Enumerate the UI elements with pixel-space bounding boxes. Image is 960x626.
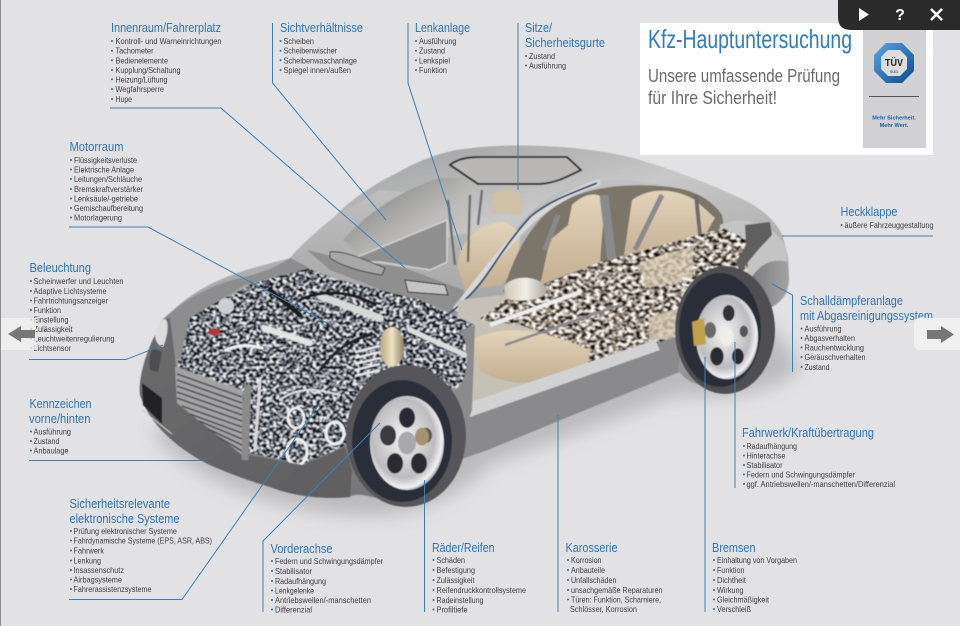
item list: Unfallschäden [571,575,617,585]
item list: Antriebswellen/-manschetten [275,595,371,605]
icon: help: ? [895,7,905,24]
leader line [29,345,163,360]
callout: Räder/Reifen [424,480,526,614]
icon: close [931,9,942,20]
front wheel arch [346,365,466,507]
hood edge [160,258,310,360]
item list: Anbaulage [34,446,69,456]
logo panel: Mehr Wert. [880,123,909,129]
item list: Leuchtweitenregulierung [34,334,115,344]
leader line [734,342,736,488]
item list: Schlösser, Korrosion [570,604,637,614]
item list: Scheibenwaschanlage [284,55,357,65]
item list [415,36,457,75]
item list: Ausführung [529,60,566,70]
heading: Vorderachse [270,542,333,556]
ground shadow [150,320,800,516]
item list: Schäden [436,555,465,565]
item list [525,51,566,70]
rear tire [679,273,761,387]
callout: Schalldämpferanlage: mit Abgasreinigungssystem [800,309,933,323]
item list [800,324,866,372]
icon: TÜV octagon [874,43,914,83]
callout: Vorderachse [263,423,383,614]
item list: Zustand [529,51,555,61]
arrow: next [914,318,960,350]
item list: Lenkgelenke [275,586,314,596]
item list: Wegfahrsperre [116,84,164,94]
callout: Kennzeichen vorne/hinten [29,397,203,460]
item list: Profiltiefe [436,604,468,614]
rear seats [623,191,715,262]
item list: Elektrische Anlage [74,164,134,174]
item list: Scheiben [284,36,314,46]
item list: Insassenschutz [74,565,124,575]
item list: Funktion [717,565,745,575]
callout: Lenkanlage [408,21,470,250]
item list: Zustand [419,46,445,56]
item list: äußere Fahrzeuggestaltung [844,220,934,230]
rear quarter panel [720,221,787,290]
callout: Sitze/Sicherheitsgurte [518,21,605,190]
item list: Hinterachse [746,450,786,460]
item list: Stabilisator [746,460,783,470]
item list: Ausführung [419,36,457,46]
side window interior [503,185,724,292]
chassis machinery [478,228,748,392]
item list: Radaufhängung [746,441,797,451]
rear wheel arch [675,266,775,394]
icon: TÜV octagon: TÜV [885,56,903,69]
item list: Einstellung [34,314,69,324]
callout: Bremsen [705,357,797,614]
item list: Zustand [804,362,830,372]
front coil spring [355,346,380,376]
item list: Befestigung [436,565,475,575]
item list: ggf. Antriebswellen/-manschetten/Differenzial [746,479,895,489]
leader line [557,415,559,612]
item list [280,36,357,75]
callout: Sicherheitsrelevante elektronische Systeme: elektronische Systeme [70,512,180,526]
front bumper [140,318,352,498]
callout: Kennzeichen vorne/hinten: vorne/hinten [29,412,91,426]
item list: Fahrtrichtungsanzeiger [34,296,108,306]
illustration: cutaway car [140,146,800,516]
blue cable [423,183,597,318]
rocker sill [453,335,682,462]
item list: Verschleiß [717,604,751,614]
heading: Heckklappe [840,205,898,219]
item list: Bremskraftverstärker [74,184,143,194]
heading: Sicherheitsrelevante [70,497,170,511]
brake booster [380,327,404,367]
item list: Lenkung [74,556,101,566]
item list [70,526,212,594]
item list: Prüfung elektronischer Systeme [74,526,177,536]
item list: Funktion [419,65,447,75]
item list: Fahrwerk [74,546,105,556]
item list: Gemischaufbereitung [74,203,143,213]
item list [432,555,526,614]
engine pulleys [287,408,344,465]
item list [567,555,663,614]
lower door cut area [455,228,745,410]
item list: Zulässigkeit [436,575,475,585]
front tire [352,380,452,502]
leader line [110,108,405,268]
center seat [540,195,605,285]
item list: Wirkung [717,585,744,595]
rear door beige panel [640,246,694,288]
item list: Heizung/Lüftung [116,74,168,84]
logo slogan: Mehr Sicherheit. [872,116,916,122]
heading: Beleuchtung [30,261,91,275]
item list: Stabilisator [275,566,312,576]
seat-back struts [448,190,482,265]
heading: Schalldämpferanlage [800,294,903,308]
item list: Kupplung/Schaltung [116,65,181,75]
main title: Kfz-Hauptuntersuchung [648,24,852,54]
item list [743,441,895,489]
leader line [424,480,426,612]
item list: Fahrdynamische Systeme (EPS, ASR, ABS) [74,536,212,546]
title box: für Ihre Sicherheit! [648,87,777,108]
item list: Türen: Funktion, Scharniere, [571,594,661,604]
item list: Ausführung [804,324,842,334]
item list: Kontroll- und Warneinrichtungen [116,36,222,46]
front fender [453,325,475,462]
heading: Bremsen [712,541,756,555]
seat belts and pillars [545,195,700,262]
callout: Karosserie [558,415,663,614]
item list: Scheinwerfer und Leuchten [34,276,124,286]
callout: Fahrwerk/Kraftübertragung [735,342,895,489]
callout: Sicherheitsrelevante elektronische Systeme [69,403,320,600]
leader line [782,235,933,237]
item list: Dichtheit [717,575,747,585]
item list: Radeinstellung [436,595,484,605]
longitudinal tube [490,292,580,325]
leader line [517,23,519,190]
windshield glass [343,178,470,262]
item list: unsachgemäße Reparaturen [571,585,663,595]
item list: Hupe [116,94,132,104]
rear bumper [745,261,789,352]
heading: Räder/Reifen [432,541,495,555]
front headrest [492,190,523,215]
item list: Geräuschverhalten [804,352,866,362]
item list: Lichtsensor [34,343,71,353]
roof line chrome [455,182,600,310]
leader line [29,460,203,462]
roof panel [333,146,786,262]
callout: Schalldämpferanlage [772,284,933,372]
item list: Korrosion [571,555,602,565]
dashboard and cowl [307,250,470,318]
item list: Abgasverhalten [804,333,855,343]
item list: Lenksäule/-getriebe [74,194,138,204]
callout: Sitze/Sicherheitsgurte: Sicherheitsgurte [525,36,605,50]
heading: Fahrwerk/Kraftübertragung [742,426,874,440]
item list: Gleichmäßigkeit [717,594,770,604]
item list [713,555,797,614]
arrow: previous [1,318,36,350]
rear lamp unit [736,222,772,272]
item list: Scheibenwischer [284,46,337,56]
item list: Fahrerassistenzsysteme [74,584,152,594]
toolbar [838,0,960,30]
heading: Motorraum [70,140,124,154]
item list: Rauchentwicklung [804,342,864,352]
item list: Federn und Schwingungsdämpfer [746,470,855,480]
front wheel rim [370,396,444,490]
leader line [772,284,792,372]
item list: Radaufhängung [275,576,326,586]
heading: Innenraum/Fahrerplatz [111,21,221,35]
sunroof [450,157,581,184]
leader line [263,423,380,612]
callout: Motorraum [69,140,327,323]
item list: Bedienelemente [116,55,168,65]
rear wheel rim [696,295,758,379]
item list: Lenkspiel [419,55,450,65]
rear brake caliper [692,318,706,346]
item list: Anbauteile [571,565,605,575]
heading: Kennzeichen [30,397,92,411]
item list [30,276,124,353]
icon: play [859,8,869,21]
item list [111,36,222,104]
item list: Motorlagerung [74,212,122,222]
radiator [175,367,251,460]
door mirror [504,278,547,300]
subtitle: Unsere umfassende Prüfung [648,65,840,86]
item list: Reifendruckkontrollsysteme [436,585,526,595]
leader line [272,23,386,220]
headlight [155,319,168,347]
callout: Innenraum/Fahrerplatz [110,21,405,268]
callout: Sichtverhältnisse [272,21,386,220]
leader line [69,227,327,323]
item list: Flüssigkeitsverluste [74,155,137,165]
front door panel behind windshield [345,220,447,270]
air intake [142,383,162,424]
rear coil spring [682,278,702,307]
front seat cushion [472,330,590,383]
front seat through windshield [458,222,520,290]
item list: Funktion [34,305,61,315]
heading: Sitze/ [525,21,552,35]
heading: Sichtverhältnisse [280,21,363,35]
engine tubes [226,290,465,450]
red cap [208,328,220,336]
callout: Beleuchtung [29,261,163,360]
item list: Spiegel innen/außen [284,65,351,75]
leader line [704,357,706,612]
callout: Heckklappe [782,205,934,236]
engine bay [178,262,475,464]
item list: Zulässigkeit [34,324,73,334]
title box [640,23,933,155]
item list: Zustand [34,436,60,446]
item list: Adaptive Lichtsysteme [34,286,107,296]
item list: Federn und Schwingungsdämpfer [275,556,383,566]
item list: Tachometer [116,46,154,56]
leader line [408,23,462,250]
item list [70,155,143,222]
car body silhouette [140,146,789,502]
logo panel [863,23,926,148]
heading: Lenkanlage [415,21,470,35]
item list: Ausführung [34,426,71,436]
item list [271,556,383,614]
leader line [69,403,320,600]
heading: Karosserie [566,541,618,555]
item list: Leitungen/Schläuche [74,174,142,184]
item list [30,426,71,456]
item list: Differenzial [275,604,312,614]
item list: Airbagsysteme [74,574,122,584]
item list: Einhaltung von Vorgaben [717,555,797,565]
icon: TÜV octagon: SÜD [890,69,898,74]
